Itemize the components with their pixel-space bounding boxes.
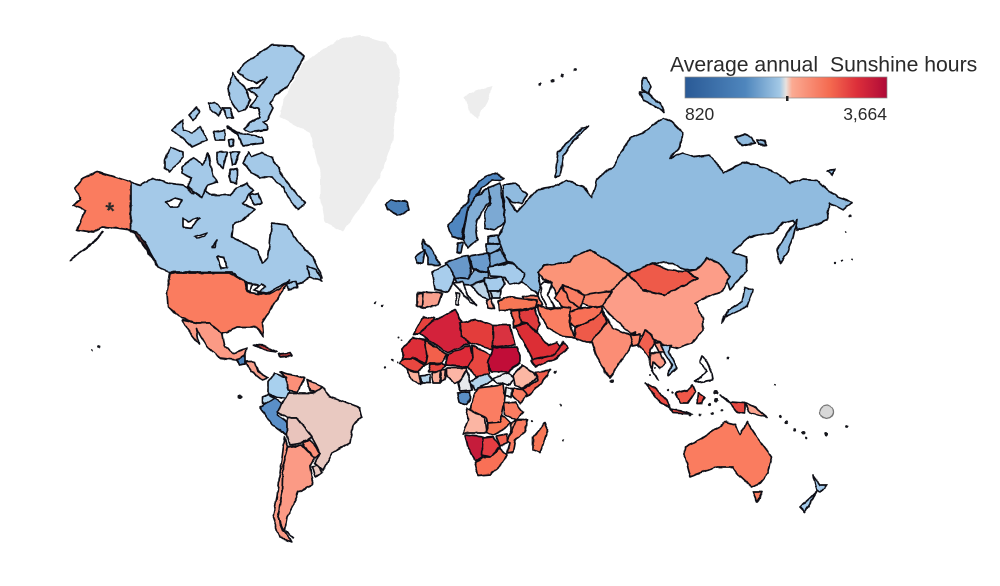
canada (130, 45, 322, 293)
mali (425, 340, 447, 365)
oceania (685, 406, 834, 512)
hispaniola (279, 353, 292, 357)
laos (654, 342, 665, 352)
sumatra (645, 383, 670, 408)
iraq (519, 308, 540, 332)
mauritania (402, 338, 427, 363)
burkina faso (428, 364, 445, 372)
senegal and guinea (400, 358, 425, 372)
uruguay (312, 465, 322, 477)
severnaya zemlya (642, 77, 651, 93)
alaska panhandle (131, 230, 158, 267)
france (432, 264, 455, 292)
poland (469, 253, 490, 272)
legend (670, 54, 977, 124)
papua new guinea (745, 403, 767, 417)
scale maximum: 3,664 (843, 104, 887, 124)
japan (722, 287, 753, 323)
uk (423, 240, 440, 265)
algeria (420, 310, 470, 353)
new zealand south (800, 491, 817, 512)
niger (445, 345, 473, 367)
asia (498, 77, 852, 417)
peru (260, 398, 287, 435)
papua (720, 395, 745, 413)
afghanistan (570, 307, 602, 327)
romania and balkans (484, 277, 505, 291)
legend title: Sunshine hours (830, 54, 977, 76)
vietnam (661, 345, 677, 376)
myanmar (638, 330, 655, 360)
new zealand north (813, 475, 827, 493)
somalia (523, 370, 550, 397)
estonia (488, 235, 501, 244)
ireland (415, 250, 425, 263)
greenland (no data) (280, 35, 492, 232)
cuba (253, 345, 277, 352)
colombia (268, 373, 290, 398)
sulawesi (697, 393, 705, 403)
severnaya zemlya south (640, 92, 664, 112)
scale marker (786, 96, 788, 101)
germany and benelux (445, 255, 471, 279)
russia (498, 118, 852, 295)
drc (470, 385, 505, 423)
oman and yemen (531, 342, 568, 367)
color scale bar (685, 77, 887, 98)
greece (486, 298, 494, 309)
guatemala (237, 356, 245, 365)
uzbekistan (562, 285, 585, 308)
thailand (650, 353, 665, 380)
bangladesh and bhutan (630, 334, 640, 346)
tanzania (504, 402, 523, 420)
zimbabwe (496, 434, 507, 446)
belarus (489, 249, 507, 267)
sudan (487, 347, 520, 372)
tasmania (753, 492, 762, 502)
chile (273, 437, 292, 542)
ghana and togo (432, 370, 440, 383)
wrangel island (827, 170, 835, 175)
uganda (505, 388, 512, 397)
java (670, 409, 692, 414)
zambia (487, 415, 510, 435)
chad (468, 345, 490, 378)
libya (460, 320, 493, 350)
spain (418, 292, 442, 308)
italy (453, 282, 477, 305)
small islands (91, 69, 853, 442)
central african republic (470, 373, 493, 390)
central america (245, 362, 268, 380)
sweden (463, 188, 490, 248)
norway (448, 173, 505, 240)
ukraine (488, 263, 525, 285)
denmark (457, 243, 463, 253)
saudi arabia (515, 323, 562, 360)
borneo (675, 385, 695, 403)
caspian sea (540, 282, 555, 308)
usa (167, 273, 290, 337)
angola (463, 408, 487, 433)
ecuador (262, 394, 275, 405)
egypt (493, 325, 515, 347)
new siberian islands (735, 134, 755, 146)
argentina (278, 445, 315, 538)
portugal (417, 293, 423, 306)
tajikistan and kyrgyzstan (583, 291, 612, 307)
syria and jordan (511, 310, 522, 328)
cameroon (458, 370, 472, 391)
kenya (512, 388, 527, 403)
aleutian chain (70, 232, 103, 260)
iran (537, 305, 575, 338)
india (592, 312, 635, 377)
legend title: Average annual (670, 54, 818, 76)
sakhalin (777, 220, 797, 263)
nigeria (447, 368, 467, 383)
novaya zemlya (555, 126, 588, 177)
pakistan (575, 311, 608, 342)
gabon and congo (457, 392, 470, 404)
kazakhstan (538, 250, 628, 297)
paraguay (303, 440, 320, 458)
sardinia (456, 293, 459, 305)
alaska (73, 172, 131, 232)
morocco (413, 317, 435, 335)
finland (485, 183, 505, 230)
south sudan (493, 373, 515, 385)
venezuela (280, 372, 305, 392)
alaska star marker: * (105, 198, 115, 225)
bolivia (287, 418, 312, 445)
sierra leone and liberia (406, 369, 421, 384)
malawi (511, 420, 516, 432)
ring atoll (820, 406, 834, 418)
ethiopia (513, 365, 537, 388)
botswana (482, 437, 500, 457)
bulgaria (490, 291, 501, 298)
benin (441, 369, 446, 382)
new siberian east (757, 140, 767, 145)
central europe (455, 269, 488, 285)
north america (70, 45, 322, 380)
turkmenistan (555, 287, 580, 312)
madagascar (533, 423, 548, 453)
scale minimum: 820 (685, 104, 714, 124)
south america (260, 372, 362, 542)
africa (400, 310, 550, 476)
brazil (278, 387, 362, 470)
latvia and lithuania (486, 244, 502, 254)
turkey (498, 297, 537, 310)
australia (685, 422, 772, 487)
western balkans (470, 281, 490, 300)
mozambique (507, 420, 527, 453)
mexico (182, 320, 247, 360)
china (600, 258, 730, 348)
guianas (307, 380, 322, 392)
mongolia (628, 263, 698, 295)
iceland (386, 200, 409, 215)
south africa (475, 448, 507, 476)
ivory coast (420, 375, 430, 383)
philippines (695, 355, 713, 382)
namibia (465, 435, 483, 460)
map layer (70, 35, 853, 542)
caucasus (523, 296, 542, 308)
europe (386, 173, 525, 309)
canadian lakes (166, 198, 266, 292)
